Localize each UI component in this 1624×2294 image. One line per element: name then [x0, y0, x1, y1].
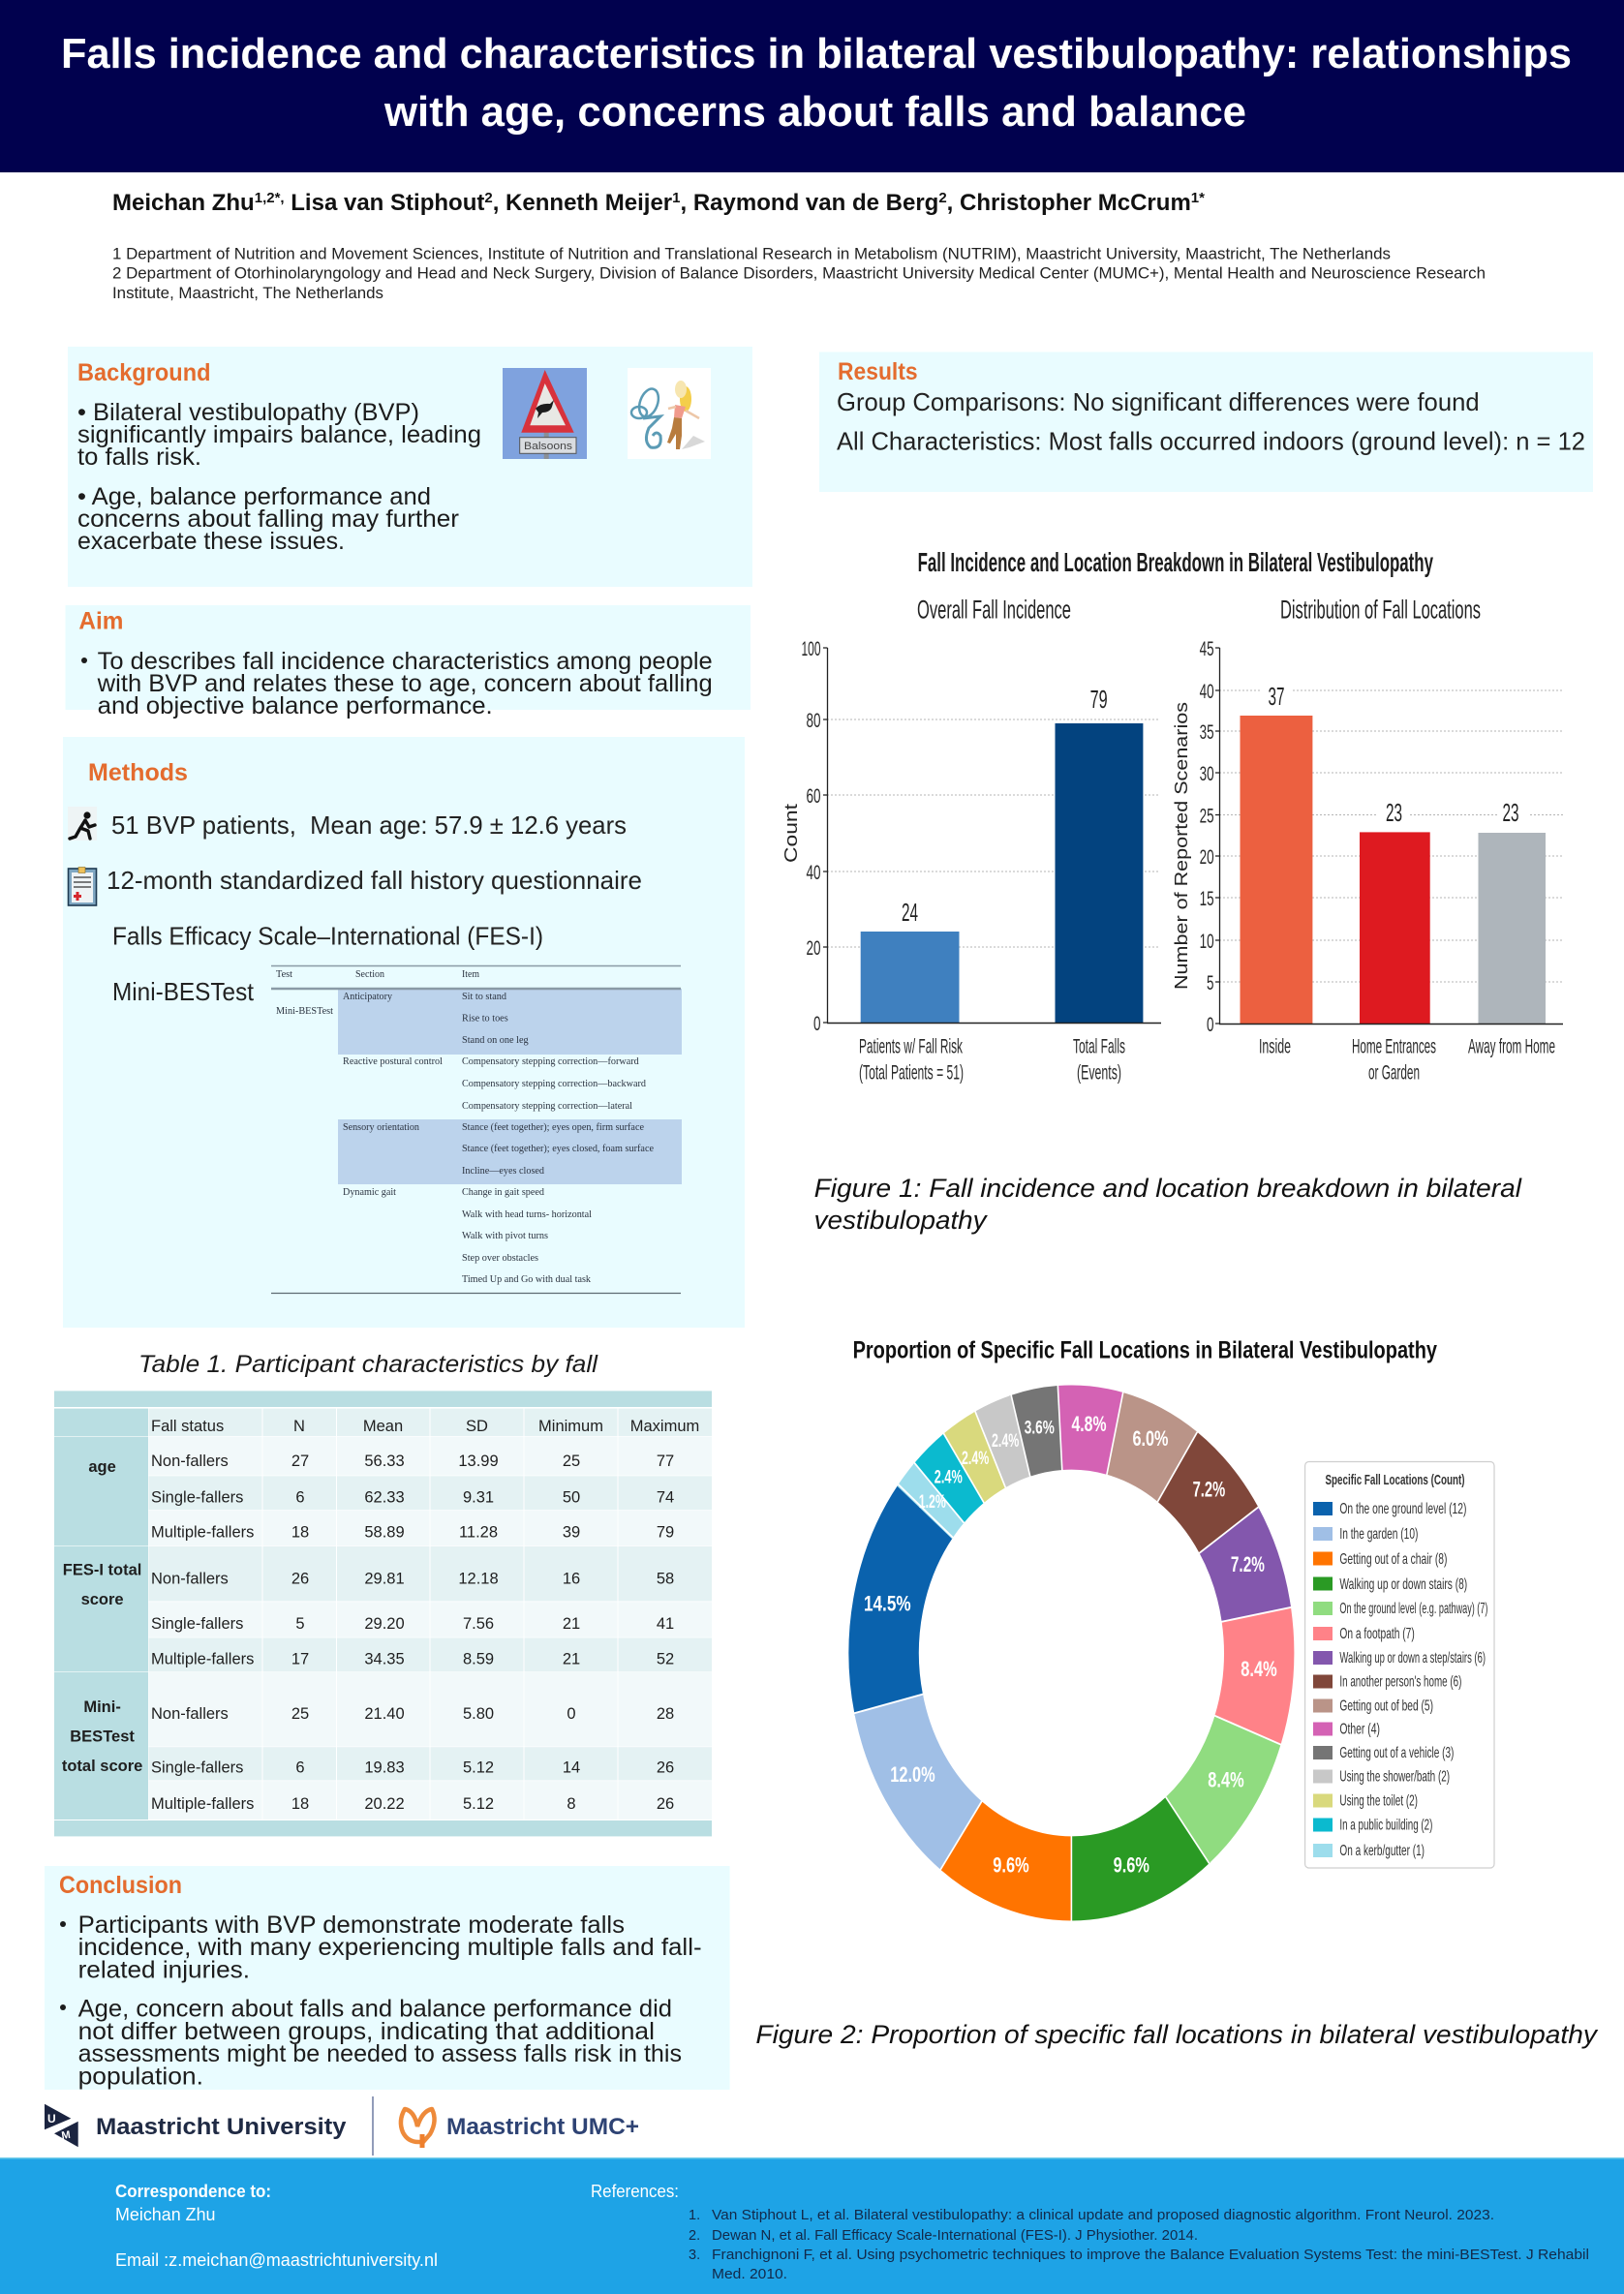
donut chart: specific fall locations: 4.8% [1071, 1412, 1106, 1436]
table: Mini-BESTest items: Change in gait speed [462, 1186, 544, 1198]
table: Mini-BESTest items: Compensatory stepping correction—forward [462, 1055, 639, 1067]
bar chart: distribution of fall locations: Number of Reported Scenarios [1172, 702, 1191, 990]
text: all characteristics: All Characteristics: Most falls occurred indoors (ground level): n = 12 [837, 426, 1585, 455]
references block: 2. [689, 2228, 700, 2244]
legend: specific fall locations: Specific Fall Locations (Count) [1325, 1472, 1465, 1488]
table group: Mini-BESTest total score: 20.22 [364, 1795, 405, 1813]
bar: inside [1240, 682, 1312, 1024]
table group: Mini-BESTest total score: 25 [291, 1705, 309, 1723]
table group: Mini-BESTest total score: Mini- [83, 1698, 121, 1716]
table group: FES-I total score: 17 [291, 1650, 309, 1667]
references block [591, 2182, 1589, 2282]
caption: figure 1: vestibulopathy [814, 1206, 988, 1235]
legend: specific fall locations: On a footpath (7) [1339, 1626, 1415, 1642]
authors: 1 [672, 190, 681, 206]
text block: conclusion bullet 1: Participants with BVP demonstrate moderate falls [78, 1912, 625, 1939]
table group: age: 50 [563, 1488, 580, 1506]
table group: FES-I total score [63, 1561, 674, 1667]
text block: background bullets: concerns about falling may further [77, 505, 459, 533]
table group: Mini-BESTest total score: total score [62, 1758, 142, 1775]
references block: Franchignoni F, et al. Using psychometric techniques to improve the Balance Evaluation Systems Test: the mini-BESTest. J Rehabil [712, 2248, 1589, 2263]
table group: age: 9.31 [463, 1488, 494, 1506]
table: Mini-BESTest items: Stance (feet together); eyes open, firm surface [462, 1121, 644, 1133]
table: Mini-BESTest items: Incline—eyes closed [462, 1165, 544, 1177]
table group: FES-I total score: 58 [657, 1571, 674, 1588]
donut chart: specific fall locations: 2.4% [962, 1449, 989, 1469]
bar chart: overall fall incidence: (Total Patients = 51) [859, 1061, 964, 1085]
table header row: Maximum [630, 1418, 699, 1435]
donut chart: specific fall locations: 1.2% [919, 1492, 946, 1513]
text block: conclusion bullet 2: assessments might be needed to assess falls risk in this [78, 2040, 682, 2067]
table group: age: 77 [657, 1453, 674, 1470]
icon: clipboard [68, 868, 97, 905]
bar chart: overall fall incidence: Count [781, 804, 801, 863]
table group: FES-I total score: 52 [657, 1650, 674, 1667]
bar chart: distribution of fall locations: 35 [1200, 721, 1214, 744]
table group: age: 27 [291, 1453, 309, 1470]
table group: FES-I total score: 34.35 [364, 1650, 405, 1667]
table: Mini-BESTest items: Compensatory stepping correction—backward [462, 1078, 646, 1089]
table header row [151, 1418, 699, 1435]
table group: Mini-BESTest total score: 28 [657, 1705, 674, 1723]
table group: FES-I total score: 8.59 [463, 1650, 494, 1667]
bar chart: distribution of fall locations: Distribution of Fall Locations [1280, 595, 1481, 624]
bar chart: overall fall incidence: 0 [813, 1013, 821, 1035]
table group: FES-I total score: 16 [563, 1571, 580, 1588]
bar chart: distribution of fall locations: or Garden [1368, 1061, 1420, 1085]
donut chart: specific fall locations [806, 1334, 1336, 1972]
table group: age: 13.99 [458, 1453, 499, 1470]
bar chart: distribution of fall locations: 40 [1200, 681, 1214, 703]
affiliations: 2 Department of Otorhinolaryngology and Head and Neck Surgery, Division of Balance Disorders, Maastricht University Medical Center (MUMC+), Mental Health and Neuroscience Research [112, 265, 1486, 283]
affiliations [112, 246, 1486, 302]
table group: FES-I total score: 41 [657, 1615, 674, 1633]
table group: Mini-BESTest total score: 14 [563, 1759, 580, 1777]
table group: FES-I total score: FES-I total [63, 1561, 141, 1578]
table group: age: Non-fallers [151, 1453, 229, 1470]
correspondence block: Meichan Zhu [115, 2205, 215, 2224]
heading: methods: Methods [88, 759, 188, 786]
table header row: Mean [363, 1418, 403, 1435]
bar: inside: 37 [1269, 682, 1284, 711]
table group: age: 56.33 [364, 1453, 405, 1470]
table: Mini-BESTest items: Stance (feet together); eyes closed, foam surface [462, 1143, 654, 1154]
bar chart: distribution of fall locations [1172, 595, 1563, 1085]
correspondence block: Correspondence to: [115, 2182, 271, 2201]
logo: Maastricht University: U [47, 2112, 56, 2126]
table: Mini-BESTest items: Section [355, 968, 384, 980]
authors: , Kenneth Meijer [493, 190, 672, 216]
table group: FES-I total score: Non-fallers [151, 1571, 229, 1588]
authors: Lisa van Stiphout [285, 190, 484, 216]
panel: aim [66, 605, 751, 719]
heading: background: Background [77, 359, 211, 386]
references block: References: [591, 2182, 679, 2201]
table: Mini-BESTest items: Item [462, 968, 479, 980]
donut chart: specific fall locations: 2.4% [992, 1431, 1019, 1452]
icon: running person [68, 807, 97, 841]
table group: age: 18 [291, 1524, 309, 1542]
table: Mini-BESTest items: Dynamic gait [343, 1186, 396, 1198]
authors: 2 [484, 190, 493, 206]
legend: specific fall locations [1305, 1462, 1494, 1868]
legend: specific fall locations: On a kerb/gutter (1) [1339, 1843, 1425, 1859]
header banner with title: Falls incidence and characteristics in bilateral vestibulopathy: relationships [61, 30, 1572, 77]
affiliations: 1 Department of Nutrition and Movement Sciences, Institute of Nutrition and Translational Research in Metabolism (NUTRIM), Maastricht University, Maastricht, The Netherlands [112, 246, 1391, 263]
table group: FES-I total score: score [81, 1591, 124, 1608]
table group: Mini-BESTest total score: 5.12 [463, 1795, 494, 1813]
bar chart: distribution of fall locations: 30 [1200, 763, 1214, 785]
table group: age: age [88, 1458, 116, 1476]
text block: conclusion bullet 2 [60, 1996, 682, 2091]
text: participants: 51 BVP patients, Mean age: 57.9 ± 12.6 years [111, 811, 627, 840]
table group: FES-I total score: Single-fallers [151, 1615, 243, 1633]
table group: age: Multiple-fallers [151, 1524, 254, 1542]
table header row: N [293, 1418, 305, 1435]
table group: Mini-BESTest total score: 18 [291, 1795, 309, 1813]
bar chart: distribution of fall locations: 20 [1200, 846, 1214, 869]
donut chart: specific fall locations: 7.2% [1231, 1552, 1265, 1576]
authors: , Raymond van de Berg [681, 190, 938, 216]
table group: age: 62.33 [364, 1488, 405, 1506]
table: Mini-BESTest items: Walk with head turns- horizontal [462, 1208, 592, 1220]
text block: background bullets [77, 399, 481, 555]
authors: 1,2*, [255, 190, 285, 206]
text block: conclusion bullet 2: not differ between groups, indicating that additional [78, 2018, 655, 2045]
logo: Maastricht University: M [61, 2129, 72, 2142]
header banner with title: with age, concerns about falls and balance [383, 88, 1246, 136]
icon: balance warning sign [503, 368, 587, 459]
table header row: SD [466, 1418, 488, 1435]
table: Mini-BESTest items: Walk with pivot turns [462, 1230, 548, 1241]
bar chart: distribution of fall locations: 5 [1207, 972, 1214, 994]
bar chart: overall fall incidence [781, 595, 1161, 1085]
bar chart: overall fall incidence: 40 [806, 862, 821, 884]
table: Mini-BESTest items: Compensatory stepping correction—lateral [462, 1100, 632, 1112]
table: Mini-BESTest items: Sensory orientation [343, 1121, 419, 1133]
table group: FES-I total score: 21 [563, 1650, 580, 1667]
legend: specific fall locations: Walking up or down a step/stairs (6) [1339, 1650, 1486, 1667]
bar chart: overall fall incidence: (Events) [1077, 1061, 1121, 1085]
text block: background bullets: significantly impairs balance, leading [77, 421, 481, 448]
text block: conclusion bullet 1 [60, 1912, 702, 1984]
table group: Mini-BESTest total score: 5.12 [463, 1759, 494, 1777]
table header row: Fall status [151, 1418, 224, 1435]
legend: specific fall locations: On the ground level (e.g. pathway) (7) [1339, 1601, 1487, 1617]
bar: home entrances or garden: 23 [1386, 798, 1402, 827]
table group: FES-I total score: 29.81 [364, 1571, 405, 1588]
table group: age: 74 [657, 1488, 674, 1506]
donut chart: specific fall locations: 6.0% [1133, 1426, 1168, 1451]
bar chart: distribution of fall locations: Home Entrances [1352, 1036, 1436, 1057]
legend: specific fall locations: In the garden (10) [1339, 1526, 1418, 1543]
text block: aim bullet: with BVP and relates these to age, concern about falling [97, 670, 713, 697]
donut chart: specific fall locations: 2.4% [935, 1468, 963, 1487]
bar: away from home [1478, 798, 1546, 1024]
table group: FES-I total score: 26 [291, 1571, 309, 1588]
table group: FES-I total score: 7.56 [463, 1615, 494, 1633]
table group: Mini-BESTest total score: 21.40 [364, 1705, 405, 1723]
table group: Mini-BESTest total score: Multiple-fallers [151, 1795, 254, 1813]
table: Mini-BESTest items: Anticipatory [343, 991, 392, 1002]
table header row: Minimum [538, 1418, 603, 1435]
text block: aim bullet: and objective balance performance. [98, 692, 493, 719]
legend: specific fall locations: Walking up or down stairs (8) [1339, 1576, 1467, 1593]
bar chart: overall fall incidence: 80 [806, 710, 821, 732]
table group: age: 25 [563, 1453, 580, 1470]
bar: patients with fall risk: 24 [902, 898, 918, 927]
panel: methods [63, 737, 745, 1328]
table group: Mini-BESTest total score: 26 [657, 1759, 674, 1777]
bar chart: distribution of fall locations: 25 [1200, 806, 1214, 827]
references block: Dewan N, et al. Fall Efficacy Scale-International (FES-I). J Physiother. 2014. [712, 2228, 1198, 2244]
header banner with title [0, 0, 1624, 172]
text: group comparisons: Group Comparisons: No significant differences were found [837, 387, 1480, 416]
authors: Meichan Zhu [112, 190, 255, 216]
donut chart: specific fall locations: 7.2% [1193, 1478, 1225, 1501]
heading: conclusion: Conclusion [59, 1872, 182, 1899]
table group: age [88, 1453, 674, 1542]
table group: FES-I total score: 29.20 [364, 1615, 405, 1633]
table: Mini-BESTest items: Test [276, 968, 292, 980]
bar chart: overall fall incidence: 20 [806, 937, 821, 960]
table: Mini-BESTest items: Stand on one leg [462, 1034, 529, 1046]
table group: age: 11.28 [459, 1524, 498, 1542]
icon: inner ear and falling woman [628, 368, 711, 459]
bar: home entrances or garden [1360, 798, 1430, 1024]
bar chart: distribution of fall locations: 45 [1200, 638, 1214, 660]
logo: Maastricht UMC+ [401, 2109, 639, 2148]
legend: specific fall locations: Getting out of bed (5) [1339, 1698, 1433, 1714]
table group: Mini-BESTest total score: 6 [295, 1759, 305, 1777]
icon: balance warning sign: Balsoons [524, 441, 573, 452]
panel: background [68, 347, 752, 587]
table group: age: 39 [563, 1524, 580, 1542]
caption: figure 2: Figure 2: Proportion of specific fall locations in bilateral vestibulopathy [755, 2020, 1599, 2049]
donut chart: specific fall locations: 3.6% [1025, 1418, 1055, 1439]
chart title: figure 2: Proportion of Specific Fall Locations in Bilateral Vestibulopathy [853, 1336, 1437, 1363]
heading: aim: Aim [78, 608, 123, 635]
text: FES-I: Falls Efficacy Scale–International (FES-I) [112, 922, 543, 951]
legend: specific fall locations: On the one ground level (12) [1339, 1501, 1466, 1517]
table 1 caption: Table 1. Participant characteristics by fall [138, 1351, 599, 1378]
affiliations: Institute, Maastricht, The Netherlands [112, 285, 383, 302]
table group: age: 6 [295, 1488, 305, 1506]
bar chart: distribution of fall locations: 15 [1200, 888, 1214, 910]
table group: Mini-BESTest total score: Single-fallers [151, 1759, 243, 1777]
table: Mini-BESTest items: Sit to stand [462, 991, 506, 1002]
correspondence block: Email :z.meichan@maastrichtuniversity.nl [115, 2250, 438, 2270]
references block: 1. [689, 2208, 700, 2223]
legend: specific fall locations: Using the toilet (2) [1339, 1793, 1418, 1809]
table: Mini-BESTest items [271, 966, 682, 1294]
authors: , Christopher McCrum [947, 190, 1191, 216]
text: Mini-BESTest: Mini-BESTest [112, 977, 255, 1006]
table group: age: 58.89 [364, 1524, 405, 1542]
authors: 1* [1191, 190, 1205, 206]
table group: FES-I total score: 5 [295, 1615, 305, 1633]
text block: background bullets: • Bilateral vestibulopathy (BVP) [77, 399, 419, 426]
text block: background bullets: to falls risk. [77, 444, 201, 471]
donut chart: specific fall locations: 8.4% [1208, 1768, 1244, 1791]
authors: 2 [938, 190, 947, 206]
references block: 3. [689, 2248, 700, 2263]
bar chart: overall fall incidence: Overall Fall Incidence [917, 595, 1071, 624]
table group: FES-I total score: 21 [563, 1615, 580, 1633]
table: Mini-BESTest items: Mini-BESTest [276, 1005, 333, 1017]
text block: aim bullet [81, 648, 713, 719]
bar: patients with fall risk [861, 898, 959, 1023]
table group: Mini-BESTest total score: Non-fallers [151, 1705, 229, 1723]
legend: specific fall locations: In another person's home (6) [1339, 1673, 1461, 1691]
legend: specific fall locations: Getting out of a chair (8) [1339, 1551, 1447, 1568]
bar chart: overall fall incidence: 100 [802, 638, 821, 660]
table group: FES-I total score: 12.18 [458, 1571, 499, 1588]
donut chart: specific fall locations: 8.4% [1241, 1657, 1277, 1681]
bar chart: distribution of fall locations: 0 [1207, 1014, 1214, 1036]
table: Mini-BESTest items: Rise to toes [462, 1013, 508, 1025]
bar chart: overall fall incidence: Patients w/ Fall Risk [859, 1036, 963, 1057]
bar chart: distribution of fall locations: Inside [1259, 1036, 1291, 1057]
bar: away from home: 23 [1503, 798, 1518, 827]
table group: Mini-BESTest total score [62, 1698, 674, 1813]
text block: background bullets: • Age, balance performance and [77, 483, 431, 510]
references block: Van Stiphout L, et al. Bilateral vestibulopathy: a clinical update and proposed diagnostic algorithm. Front Neurol. 2023. [712, 2208, 1494, 2223]
text block: conclusion bullet 1: incidence, with many experiencing multiple falls and fall- [78, 1934, 702, 1961]
text block: conclusion bullet 1: related injuries. [78, 1957, 250, 1984]
correspondence block [115, 2182, 438, 2270]
table: Mini-BESTest items: Timed Up and Go with dual task [462, 1273, 591, 1285]
footer band [0, 2157, 1624, 2294]
table group: Mini-BESTest total score: 26 [657, 1795, 674, 1813]
bar: total falls [1056, 685, 1143, 1023]
table: Mini-BESTest items: Step over obstacles [462, 1252, 538, 1264]
legend: specific fall locations: Using the shower/bath (2) [1339, 1768, 1450, 1786]
table: Mini-BESTest items: Reactive postural control [343, 1055, 443, 1067]
text block: background bullets: exacerbate these issues. [77, 528, 345, 555]
table group: age: 79 [657, 1524, 674, 1542]
legend: specific fall locations: Other (4) [1339, 1722, 1380, 1737]
table group: age: Single-fallers [151, 1488, 243, 1506]
table group: FES-I total score: Multiple-fallers [151, 1650, 254, 1667]
text block: conclusion bullet 2: Age, concern about falls and balance performance did [78, 1996, 672, 2023]
text: questionnaire: 12-month standardized fall history questionnaire [107, 866, 642, 895]
donut chart: specific fall locations: 9.6% [1114, 1853, 1149, 1877]
bar: total falls: 79 [1090, 685, 1108, 714]
caption: figure 1: Figure 1: Fall incidence and location breakdown in bilateral [814, 1174, 1522, 1203]
donut chart: specific fall locations: 12.0% [890, 1762, 935, 1787]
table group: Mini-BESTest total score: 19.83 [364, 1759, 405, 1777]
text block: conclusion bullet 2: population. [78, 2064, 203, 2091]
logo: Maastricht University [45, 2104, 347, 2147]
panel: results [819, 352, 1593, 492]
legend: specific fall locations: In a public building (2) [1339, 1817, 1432, 1834]
table group: Mini-BESTest total score: 0 [567, 1705, 576, 1723]
table group: Mini-BESTest total score: 8 [567, 1795, 576, 1813]
donut chart: specific fall locations: 9.6% [993, 1853, 1029, 1877]
logo: Maastricht UMC+: Maastricht UMC+ [446, 2114, 639, 2140]
bar chart: distribution of fall locations: 10 [1200, 931, 1214, 953]
text block: aim bullet: To describes fall incidence characteristics among people [98, 648, 713, 675]
legend: specific fall locations: Getting out of a vehicle (3) [1339, 1745, 1454, 1761]
bar chart: overall fall incidence: 60 [806, 785, 821, 808]
table group: Mini-BESTest total score: BESTest [70, 1728, 135, 1745]
bar chart: overall fall incidence: Total Falls [1073, 1036, 1125, 1057]
logo: Maastricht University: Maastricht University [96, 2114, 347, 2140]
bar chart: distribution of fall locations: Away from Home [1468, 1036, 1555, 1057]
table group: Mini-BESTest total score: 5.80 [463, 1705, 494, 1723]
table 1: participant characteristics [54, 1391, 712, 1836]
donut chart: specific fall locations: 14.5% [864, 1592, 911, 1615]
references block: Med. 2010. [712, 2267, 787, 2282]
caption: figure 1 [814, 1174, 1522, 1235]
heading: results: Results [838, 358, 918, 385]
panel: conclusion [45, 1866, 730, 2091]
